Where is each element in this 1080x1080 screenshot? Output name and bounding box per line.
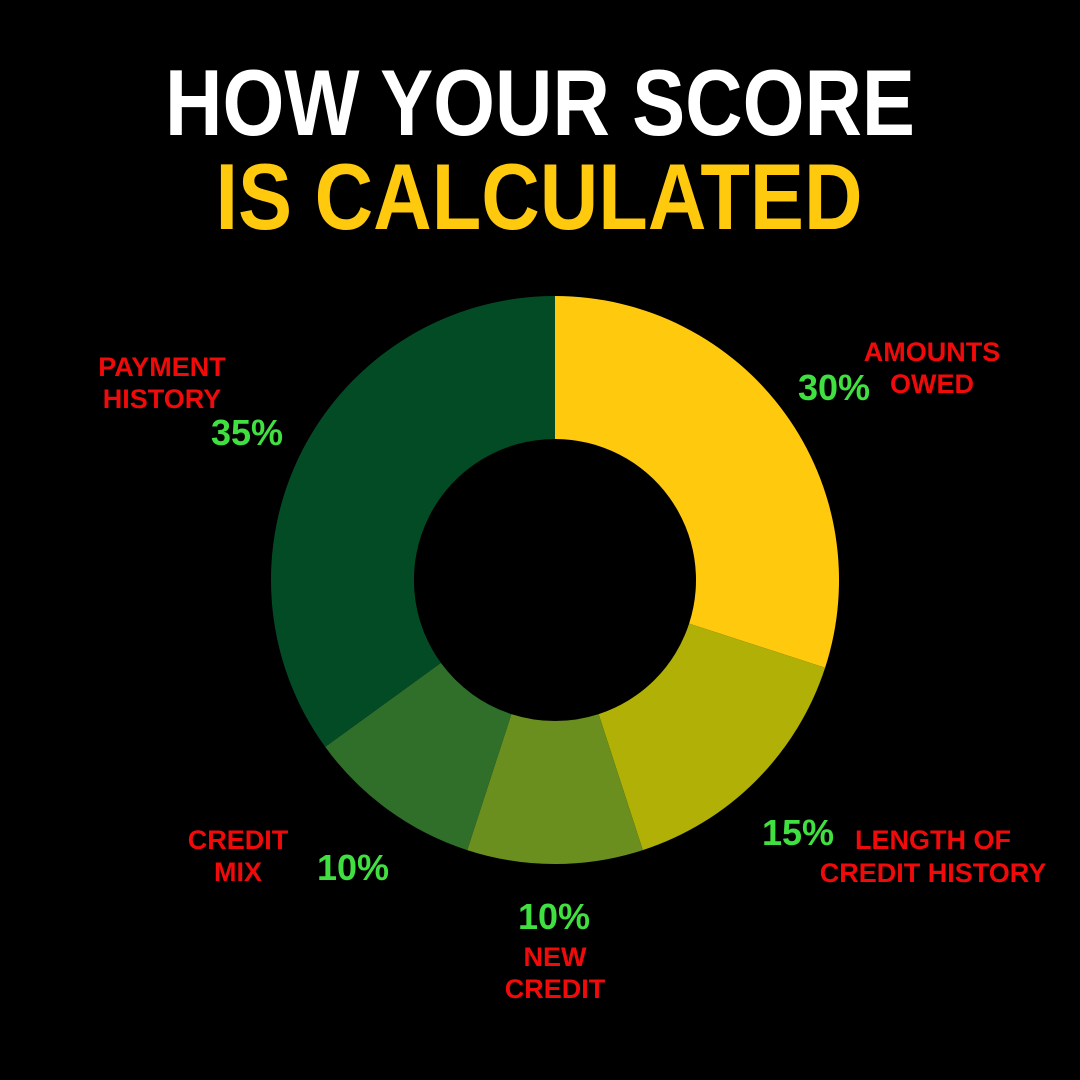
label: payment history — [98, 352, 283, 453]
label: amounts owed: OWED — [890, 369, 974, 399]
segment: new credit 10% — [467, 714, 643, 864]
label: length of credit history: LENGTH OF — [855, 825, 1011, 855]
label: credit mix — [188, 825, 389, 888]
label: credit mix: 10% — [317, 847, 389, 888]
donut chart — [271, 296, 839, 864]
segment: amounts owed 30% — [555, 296, 839, 668]
label: length of credit history — [762, 812, 1046, 888]
label: payment history: HISTORY — [103, 384, 221, 414]
label: amounts owed: 30% — [798, 367, 870, 408]
segment: length of credit history 15% — [599, 624, 825, 850]
label: length of credit history: 15% — [762, 812, 834, 853]
label: new credit — [505, 896, 606, 1004]
title: IS CALCULATED — [216, 144, 862, 249]
label: payment history: PAYMENT — [98, 352, 226, 382]
label: length of credit history: CREDIT HISTORY — [820, 858, 1046, 888]
segment: payment history 35% — [271, 296, 555, 747]
label: new credit: 10% — [518, 896, 590, 937]
label: payment history: 35% — [211, 412, 283, 453]
label: amounts owed — [798, 337, 1000, 408]
title — [165, 50, 915, 249]
label: amounts owed: AMOUNTS — [864, 337, 1000, 367]
title: HOW YOUR SCORE — [165, 50, 915, 155]
label: new credit: CREDIT — [505, 974, 606, 1004]
label: credit mix: CREDIT — [188, 825, 289, 855]
segment: credit mix 10% — [325, 663, 511, 850]
label: new credit: NEW — [524, 942, 587, 972]
label: credit mix: MIX — [214, 857, 262, 887]
